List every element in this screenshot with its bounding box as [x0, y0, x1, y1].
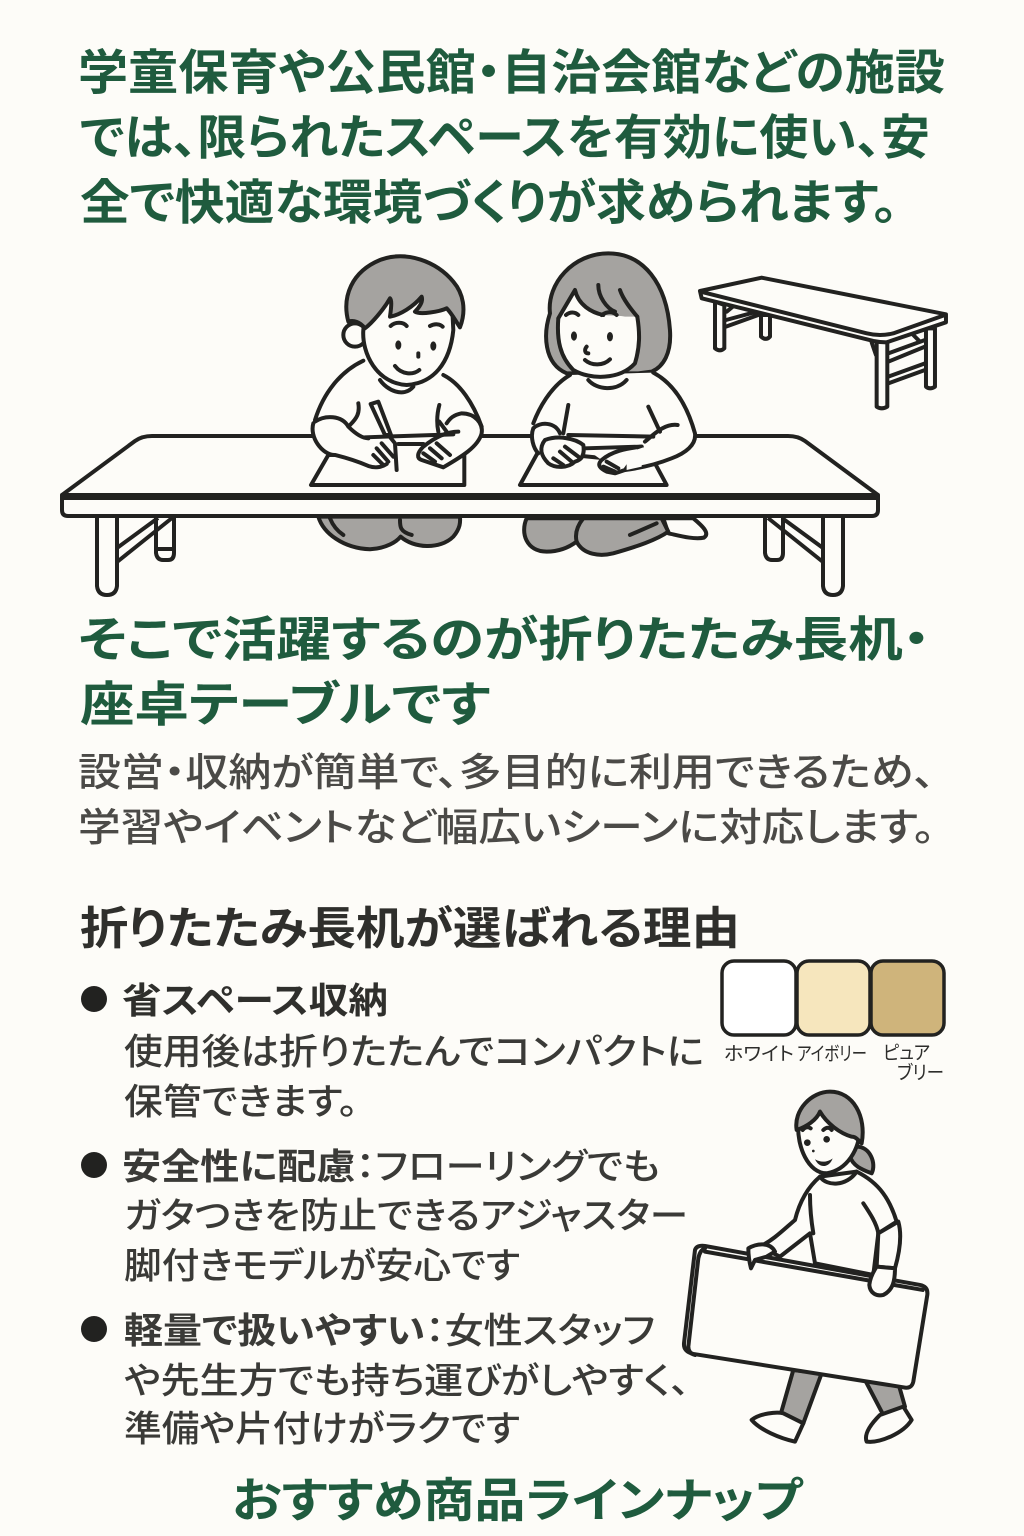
colour swatches: ホワイト	[724, 1044, 794, 1065]
table legs	[97, 516, 843, 595]
title: 学童保育や公民館・自治会館などの施設	[78, 47, 945, 100]
hands	[748, 1244, 895, 1295]
head	[796, 1092, 863, 1173]
illustration: small folding table	[700, 278, 946, 408]
reason 2: ガタつきを防止できるアジャスター	[124, 1195, 688, 1236]
reason 1	[81, 980, 704, 1122]
reason 3	[81, 1310, 690, 1449]
heading: folding table: そこで活躍するのが折りたたみ長机・	[78, 614, 930, 667]
body text	[78, 752, 935, 850]
title: 全で快適な環境づくりが求められます。	[80, 177, 898, 230]
boy legs	[318, 517, 460, 549]
girl legs	[524, 518, 706, 555]
reason 3: 準備や片付けがラクです	[124, 1408, 520, 1449]
legs	[752, 1370, 912, 1442]
folded table	[684, 1246, 927, 1388]
reason 2	[81, 1146, 688, 1286]
colour swatches: ピュア	[883, 1043, 930, 1064]
illustration: woman carrying folded table	[684, 1092, 927, 1442]
colour swatches: アイボリー	[797, 1043, 867, 1065]
reason 3: や先生方でも持ち運びがしやすく、	[124, 1360, 690, 1401]
heading: folding table	[78, 614, 930, 732]
reason 2: 脚付きモデルが安心です	[124, 1245, 520, 1286]
colour swatches	[722, 961, 944, 1084]
reason 1: 使用後は折りたたんでコンパクトに	[124, 1031, 704, 1072]
illustration: two children at table	[311, 253, 706, 555]
body text: 設営・収納が簡単で、多目的に利用できるため、	[78, 752, 935, 795]
reason 1: 省スペース収納	[122, 980, 388, 1021]
reason 2: 安全性に配慮 ：フローリングでも	[122, 1146, 660, 1187]
heading: folding table: 座卓テーブルです	[80, 679, 490, 732]
title	[78, 47, 945, 230]
title: では、限られたスペースを有効に使い、安	[80, 112, 930, 165]
colour swatches: ブリー	[897, 1061, 944, 1084]
table front edge band	[62, 495, 878, 516]
girl	[520, 253, 695, 485]
boy	[311, 256, 482, 485]
footer heading: おすすめ商品ラインナップ	[232, 1474, 804, 1527]
reason 1: 保管できます。	[124, 1081, 358, 1122]
illustration: large low table	[62, 436, 878, 595]
reason 3: 軽量で扱いやすい ：女性スタッフ	[124, 1310, 655, 1351]
heading: reasons: 折りたたみ長机が選ばれる理由	[80, 903, 740, 954]
torso and arm	[760, 1147, 900, 1275]
body text: 学習やイベントなど幅広いシーンに対応します。	[78, 807, 935, 850]
